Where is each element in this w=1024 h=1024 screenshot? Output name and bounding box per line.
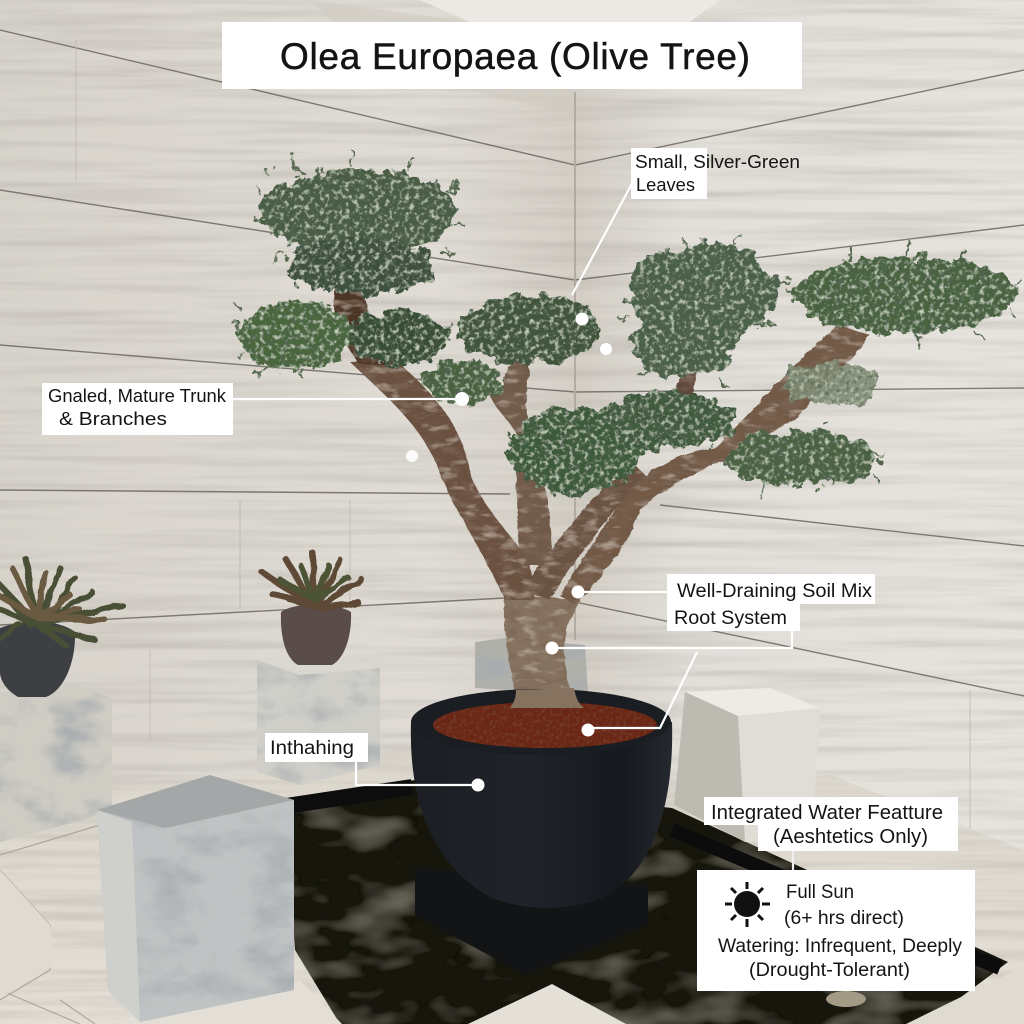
trunk foot	[510, 688, 584, 708]
title: Olea Europaea (Olive Tree)	[280, 36, 750, 77]
label: water feature: (Aeshtetics Only)	[773, 826, 928, 848]
leader: roots	[552, 630, 792, 648]
pedestal: left with plant	[0, 558, 122, 842]
floor tile seams	[0, 825, 100, 1024]
inner limb	[520, 462, 648, 600]
care: watering text: (Drought-Tolerant)	[749, 960, 910, 981]
leader: care box	[792, 851, 794, 870]
label: trunk: Gnaled, Mature Trunk	[48, 385, 227, 406]
foliage: centre pad	[509, 390, 734, 494]
right limb	[560, 325, 870, 604]
foliage: far right pad	[787, 241, 1023, 346]
tree trunk and branches	[334, 248, 870, 708]
leader: leaves	[572, 178, 635, 295]
plant left	[0, 558, 122, 645]
label: soil and roots: Well-Draining Soil Mix	[677, 581, 873, 602]
plinth	[415, 868, 648, 975]
right tile	[906, 966, 1024, 1024]
ceiling	[420, 0, 720, 22]
pot body	[411, 722, 672, 908]
reflected pebble	[826, 991, 866, 1007]
left tile	[100, 980, 342, 1024]
label: leaves: Small, Silver-Green	[635, 151, 800, 172]
plant pot middle	[281, 604, 351, 665]
care: watering text: Watering: Infrequent, Deeply	[718, 936, 962, 957]
label: soil and roots	[667, 574, 875, 631]
foliage: lower left pad	[232, 301, 453, 380]
foliage: upper right crown	[618, 234, 789, 389]
leader: root diagonal	[588, 652, 697, 728]
label: trunk: & Branches	[59, 408, 167, 429]
marker dots	[406, 312, 612, 792]
title	[222, 22, 802, 89]
right wall	[575, 0, 1024, 860]
pedestal: back	[475, 638, 588, 695]
label: leaves: Leaves	[636, 174, 695, 195]
foliage: pale pad behind limb	[782, 363, 882, 405]
icon: sun	[725, 882, 770, 927]
leader: trunk	[233, 398, 462, 400]
main trunk	[504, 595, 580, 708]
label: pot	[265, 733, 368, 762]
small stem	[664, 360, 697, 420]
label: water feature	[704, 797, 958, 851]
care: sun text	[784, 882, 904, 929]
upper left stem	[334, 248, 395, 365]
soil	[433, 702, 657, 748]
leader: pot	[356, 762, 478, 785]
pool rim edge	[286, 787, 412, 806]
care: sun text: (6+ hrs direct)	[784, 908, 904, 929]
foliage: middle crown	[423, 295, 600, 404]
front tile	[468, 984, 626, 1024]
marble block foreground	[97, 775, 294, 1022]
care: sun text: Full Sun	[786, 882, 854, 903]
label: water feature: Integrated Water Featture	[711, 802, 943, 824]
leader lines and dots	[233, 178, 793, 870]
label: pot: Inthahing	[270, 738, 354, 759]
leader: soil	[578, 591, 667, 593]
pedestal: middle with plant	[257, 552, 380, 785]
care: watering text	[718, 936, 962, 981]
plant pot left	[0, 622, 75, 697]
label: soil and roots: Root System	[674, 608, 787, 629]
foliage: lower right pad	[726, 419, 885, 496]
step at front left	[0, 870, 55, 998]
pot rim	[411, 689, 671, 755]
planter: black pot on plinth	[411, 688, 672, 975]
label: leaves	[631, 148, 800, 199]
pedestal: right	[674, 688, 820, 842]
plant middle	[262, 552, 362, 608]
foliage	[232, 151, 1023, 496]
foliage: top left crown	[254, 151, 462, 295]
label: trunk	[42, 383, 233, 435]
dark water pool	[100, 780, 1024, 1024]
middle stem	[488, 358, 552, 565]
panel: care information	[697, 870, 975, 991]
left limb	[350, 360, 535, 600]
left wall	[0, 0, 575, 810]
floor	[0, 745, 1024, 1024]
